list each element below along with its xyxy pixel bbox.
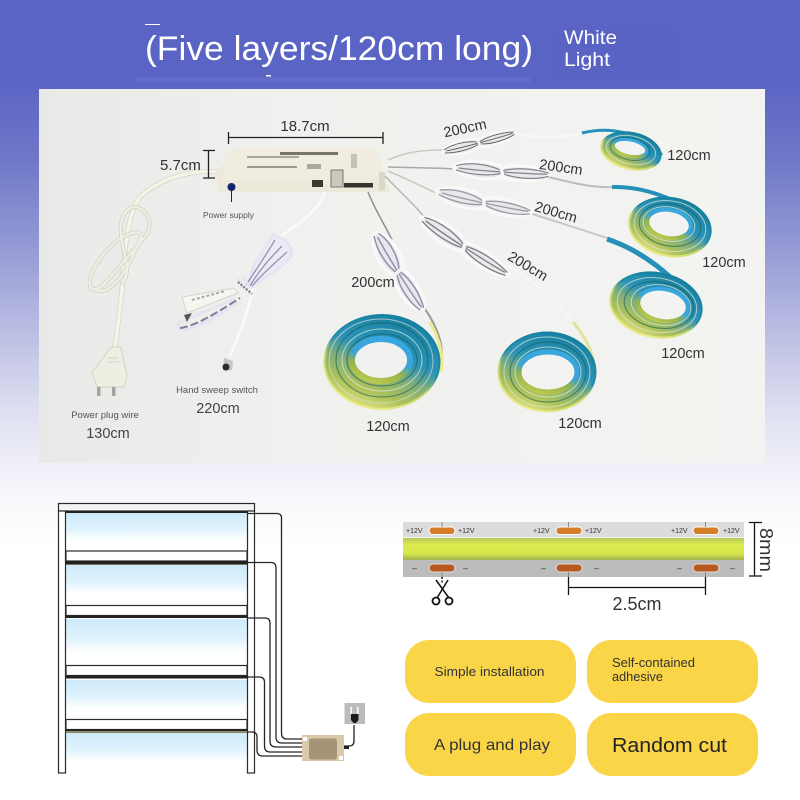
- icon: plug: [92, 347, 127, 396]
- sensor module: [182, 288, 238, 322]
- feature: self-contained adhesive: adhesive: [612, 670, 663, 684]
- dimension: 5.7cm: 5.7cm: [160, 157, 201, 174]
- hand sweep switch and wire: [178, 192, 325, 357]
- feature: self-contained adhesive: Self-contained: [612, 656, 695, 670]
- feature: simple installation: [405, 640, 576, 703]
- dimension: 18.7cm: [228, 118, 383, 144]
- LED strips under shelves: [66, 511, 247, 733]
- feature: self-contained adhesive: [587, 640, 758, 703]
- title: (Five layers/120cm long): [145, 30, 533, 68]
- LED coil 4: [612, 187, 715, 263]
- length labels: 130cm: [86, 426, 130, 442]
- length labels: 200cm: [442, 117, 488, 141]
- cut lines: [442, 522, 706, 577]
- length labels: 200cm: [538, 157, 584, 179]
- LED coil 3: [605, 239, 707, 345]
- feature: random cut: Random cut: [612, 735, 727, 757]
- driver box: [302, 735, 344, 761]
- length labels: 200cm: [351, 275, 395, 291]
- polarity labels: –: [730, 563, 735, 573]
- feature: random cut: [587, 713, 758, 776]
- light colour label: Light: [564, 50, 611, 71]
- LED coil 2: [498, 322, 596, 412]
- dimension: 8mm: [749, 522, 776, 576]
- title banner: [135, 24, 675, 83]
- panel: product photo: [39, 89, 765, 463]
- length labels: 200cm: [533, 199, 579, 227]
- dimension: 2.5cm: 2.5cm: [612, 594, 662, 614]
- length labels: 120cm: [558, 416, 602, 432]
- polarity labels: +12V: [585, 528, 602, 535]
- feature: a plug and play: [405, 713, 576, 776]
- hank 5: [365, 227, 432, 316]
- polarity labels: –: [463, 563, 468, 573]
- icon: wall socket and plug: [344, 703, 365, 749]
- feature: a plug and play: A plug and play: [434, 737, 550, 754]
- light colour label: White: [564, 28, 617, 49]
- LED coil 1: [324, 315, 442, 409]
- length labels: 120cm: [702, 255, 746, 271]
- cables to driver: [247, 514, 302, 756]
- length labels: 120cm: [667, 148, 711, 164]
- feature: simple installation: Simple installation: [434, 665, 545, 679]
- polarity labels: +12V: [458, 528, 475, 535]
- wire hanks: [365, 127, 552, 316]
- light colour label: [564, 28, 617, 71]
- power supply box: [217, 148, 390, 192]
- polarity labels: +12V: [406, 528, 423, 535]
- LED strip diagram: [403, 522, 744, 577]
- dimension: 8mm: 8mm: [756, 528, 776, 572]
- LED coil 5: [582, 127, 664, 175]
- length labels: 120cm: [366, 419, 410, 435]
- polarity labels: [406, 528, 740, 573]
- polarity labels: –: [412, 563, 417, 573]
- hank 3: [434, 184, 534, 221]
- hank 4: [415, 211, 513, 283]
- icon: scissors: [432, 577, 452, 604]
- polarity labels: +12V: [723, 528, 740, 535]
- dimension: 2.5cm: [568, 577, 706, 614]
- polarity labels: +12V: [533, 528, 550, 535]
- shelf diagram: [58, 504, 365, 773]
- power supply label: Power supply: [203, 210, 255, 220]
- polarity labels: +12V: [671, 528, 688, 535]
- length labels: 200cm: [505, 249, 550, 285]
- polarity labels: –: [541, 563, 546, 573]
- length labels: 120cm: [661, 346, 705, 362]
- icon: sensor switch: [222, 358, 233, 371]
- dimension: 5.7cm: [160, 150, 215, 178]
- wires from supply to hanks: [368, 133, 612, 360]
- power plug wire: [90, 172, 218, 350]
- length labels: 220cm: [196, 401, 240, 417]
- power supply label: [203, 183, 255, 220]
- hank 1: [441, 127, 517, 159]
- polarity labels: –: [594, 563, 599, 573]
- length labels: Hand sweep switch: [176, 385, 258, 396]
- solder pads: [429, 527, 719, 572]
- length labels: Power plug wire: [71, 410, 139, 421]
- hank 2: [453, 160, 552, 183]
- shelf frame: [58, 504, 254, 773]
- length labels: [71, 117, 746, 442]
- shelf glow panels: [66, 513, 247, 773]
- polarity labels: –: [677, 563, 682, 573]
- dimension: 18.7cm: 18.7cm: [280, 118, 330, 135]
